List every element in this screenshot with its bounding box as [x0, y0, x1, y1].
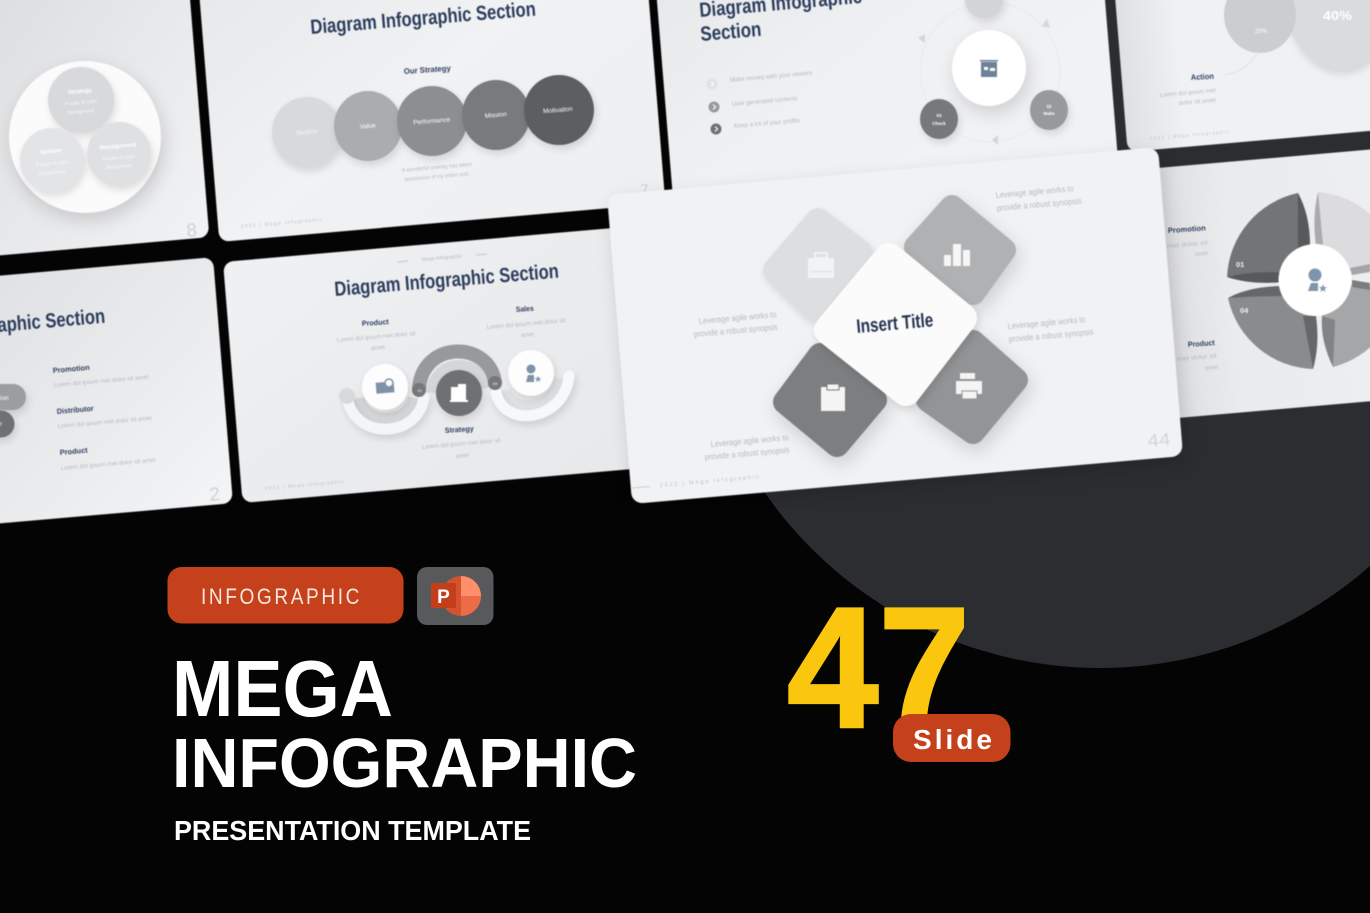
circle: make: 02: [1046, 104, 1052, 109]
list item: product: Product: [59, 446, 89, 457]
center dark circle with icon: [436, 370, 482, 416]
circle 40 percent: 40%: [1323, 8, 1352, 23]
label: promotion: amet: [1195, 251, 1208, 258]
dark decorative circle: [692, 0, 1370, 668]
title: mega infographic: INFOGRAPHIC: [172, 724, 637, 802]
center circle and icon: [1278, 244, 1352, 316]
center diamond: [829, 258, 962, 391]
callout: top right: provide a robust synopsis: [996, 196, 1082, 213]
label: product: Product: [362, 317, 390, 328]
slide: strategy circles: [195, 0, 665, 242]
circle chain: Value: [360, 122, 377, 131]
circle: strategy: A state of calm: [64, 99, 98, 107]
segment 04: 04: [1240, 306, 1249, 315]
bullet list: [706, 70, 814, 134]
left swoosh inner shade: [359, 398, 414, 419]
label: product: Lorem dol ipsum met dolor sit: [337, 331, 416, 344]
segment 01: 01: [1236, 260, 1244, 269]
label: product: amet: [371, 345, 385, 352]
main slide: [607, 147, 1183, 504]
slide: wave diagram: [223, 227, 643, 503]
label: product: [1177, 338, 1218, 372]
circle 40 percent: [1284, 0, 1370, 70]
circle: system: Background: [38, 169, 66, 177]
footer: 2022 | Mega Infographic: [241, 217, 323, 230]
circle: strategy: [48, 67, 114, 133]
title: [698, 0, 863, 46]
title: Section: [699, 18, 762, 46]
label: sales: [487, 304, 566, 339]
footer: 2022 | Mega Infographic: [1150, 129, 1230, 141]
list item: distributor: Distributor: [56, 404, 94, 416]
list item: promotion: Lorem dol ipsum met dolor sit amet: [54, 375, 149, 389]
center circle and icon: ★: [1318, 283, 1328, 295]
start dot: [339, 388, 355, 404]
circle: management: Background: [105, 163, 133, 171]
action label: [1160, 72, 1216, 107]
callout: bottom left: Leverage agile works to: [710, 432, 789, 449]
pill labels: [0, 384, 26, 438]
diamond: printer: [928, 342, 1016, 432]
circle chain: Mission: [485, 111, 508, 120]
eyebrow: Mega Infographic: [422, 253, 463, 263]
segment 01: [1227, 193, 1310, 283]
gray arch: 03: [493, 381, 498, 386]
badge: infographic: INFOGRAPHIC: [201, 584, 362, 609]
segment 04: [1228, 286, 1317, 369]
label: promotion: [1167, 223, 1208, 258]
label: product: [337, 317, 416, 352]
icon: powerpoint: P: [437, 587, 450, 608]
ring arrows: [918, 19, 1050, 145]
ring: [920, 2, 1060, 142]
caption: A wonderful serenity has taken: [402, 162, 472, 174]
circle: make: [1030, 90, 1068, 130]
callout: bottom left: provide a robust synopsis: [704, 445, 790, 462]
slide count badge: [893, 714, 1010, 762]
callout: bottom left: [704, 432, 790, 462]
left white circle with icon: [362, 364, 408, 410]
slide count badge: Slide: [913, 724, 992, 755]
segment 02: [1314, 192, 1370, 275]
title: mega infographic: [172, 644, 637, 802]
slide: lower left list: [0, 257, 233, 526]
callout: top right: Leverage agile works to: [995, 183, 1074, 200]
callout: left: Leverage agile works to: [698, 309, 777, 326]
gray arch: 01: [418, 388, 423, 393]
circle: management: Management: [99, 142, 136, 152]
outer white circle: [9, 61, 161, 213]
diamond: bars: [916, 207, 1004, 293]
label: sales: Lorem dol ipsum met dolor sit: [487, 318, 566, 331]
slide: petal pie: [1100, 138, 1370, 423]
subtitle: PRESENTATION TEMPLATE: [174, 815, 531, 846]
eyebrow: [397, 253, 487, 263]
footer: 2022 | Mega Infographic: [265, 479, 345, 492]
pill labels: r: [0, 421, 3, 428]
title: mega infographic: MEGA: [172, 644, 393, 733]
page number 44: 44: [1147, 429, 1171, 451]
circle: strategy: Strategy: [68, 88, 93, 96]
badge: infographic: [168, 567, 404, 624]
title: Diagram Infographic Section: [334, 260, 560, 301]
right white circle with icon: [508, 350, 554, 396]
label: product: amet: [1205, 365, 1218, 372]
slide: three circles: [0, 0, 209, 260]
diamond: clipboard: [785, 355, 875, 445]
label: promotion: Promotion: [1168, 223, 1206, 235]
circle: system: System: [40, 148, 62, 156]
circle 20 percent: 20%: [1255, 29, 1268, 35]
circle chain: [272, 75, 594, 167]
circle chain: Motivation: [543, 106, 573, 115]
list item: distributor: Lorem dol ipsum met dolor sit amet: [58, 416, 152, 430]
list item: distributor: [56, 404, 152, 430]
label: strategy: amet: [456, 453, 469, 460]
bullet list: Make money with your viewers: [730, 70, 814, 84]
circle: system: A state of calm: [35, 160, 69, 168]
right swoosh: [496, 376, 569, 416]
center title: Insert Title: [856, 309, 934, 338]
slide count number: 47: [787, 572, 970, 764]
slide: percentages: [1108, 0, 1370, 152]
label: product: met dolor sit: [1177, 353, 1217, 363]
circle chain: Performance: [413, 116, 451, 127]
bullet list: User generated contents: [732, 95, 799, 108]
diamond: briefcase: [775, 220, 860, 308]
label: promotion: met dolor sit: [1167, 240, 1208, 250]
action label: Lorem dol ipsum met: [1160, 88, 1216, 99]
title: aphic Section: [0, 305, 106, 337]
circle: make: Make: [1043, 111, 1055, 116]
subtitle: Our Strategy: [404, 64, 452, 76]
left swoosh: [347, 396, 424, 429]
footer: 2022 | Mega Infographic: [660, 474, 760, 489]
label: strategy: Lorem dol ipsum met dolor sit: [422, 438, 501, 451]
callout: left: provide a robust synopsis: [693, 322, 778, 339]
right white circle with icon: ★: [534, 374, 542, 384]
caption: possession of my entire soul.: [405, 171, 470, 183]
caption: [402, 162, 472, 183]
list item: promotion: [52, 363, 149, 389]
page number 7: 7: [640, 181, 650, 199]
callout: right: provide a robust synopsis: [1008, 327, 1094, 344]
callout: right: Leverage agile works to: [1007, 314, 1086, 331]
callout: top right: [995, 183, 1082, 213]
top circle: [965, 0, 1003, 18]
circle: management: [87, 122, 151, 186]
circle: strategy: Background: [67, 108, 95, 116]
label: sales: amet: [521, 332, 534, 339]
circle 20 percent: [1224, 0, 1296, 53]
center circle and icon: [952, 30, 1026, 106]
label: product: Product: [1188, 338, 1216, 349]
circle: check: Check: [932, 121, 946, 126]
pill labels: ion: [0, 395, 9, 402]
circle: check: 03: [936, 113, 942, 118]
page number 2: 2: [209, 484, 221, 506]
label: strategy: [422, 424, 501, 460]
slide: radial cycle: [652, 0, 1121, 230]
icon: powerpoint: [417, 567, 494, 625]
right swoosh inner shade: [506, 378, 558, 405]
circle: check: [920, 99, 958, 139]
connector: [1225, 54, 1257, 75]
list item: promotion: Promotion: [52, 363, 90, 375]
callout: left: [693, 309, 778, 339]
list item: product: Lorem dol ipsum met dolor sit amet: [61, 458, 156, 472]
page number 8: 8: [186, 220, 198, 242]
callout: right: [1007, 314, 1094, 344]
circle chain: Section: [296, 128, 318, 137]
circle: management: A state of calm: [102, 154, 136, 162]
arch inner shade: [432, 366, 486, 393]
list item: product: [59, 446, 156, 472]
gray arch: [412, 351, 502, 397]
label: sales: Sales: [516, 304, 534, 314]
label: strategy: Strategy: [445, 424, 475, 435]
circle: system: [20, 128, 84, 192]
action label: dolor sit amet: [1179, 98, 1216, 107]
segment 03: [1322, 280, 1370, 367]
action label: Action: [1191, 72, 1214, 82]
bullet list: Keep a lot of your profits: [734, 117, 801, 130]
